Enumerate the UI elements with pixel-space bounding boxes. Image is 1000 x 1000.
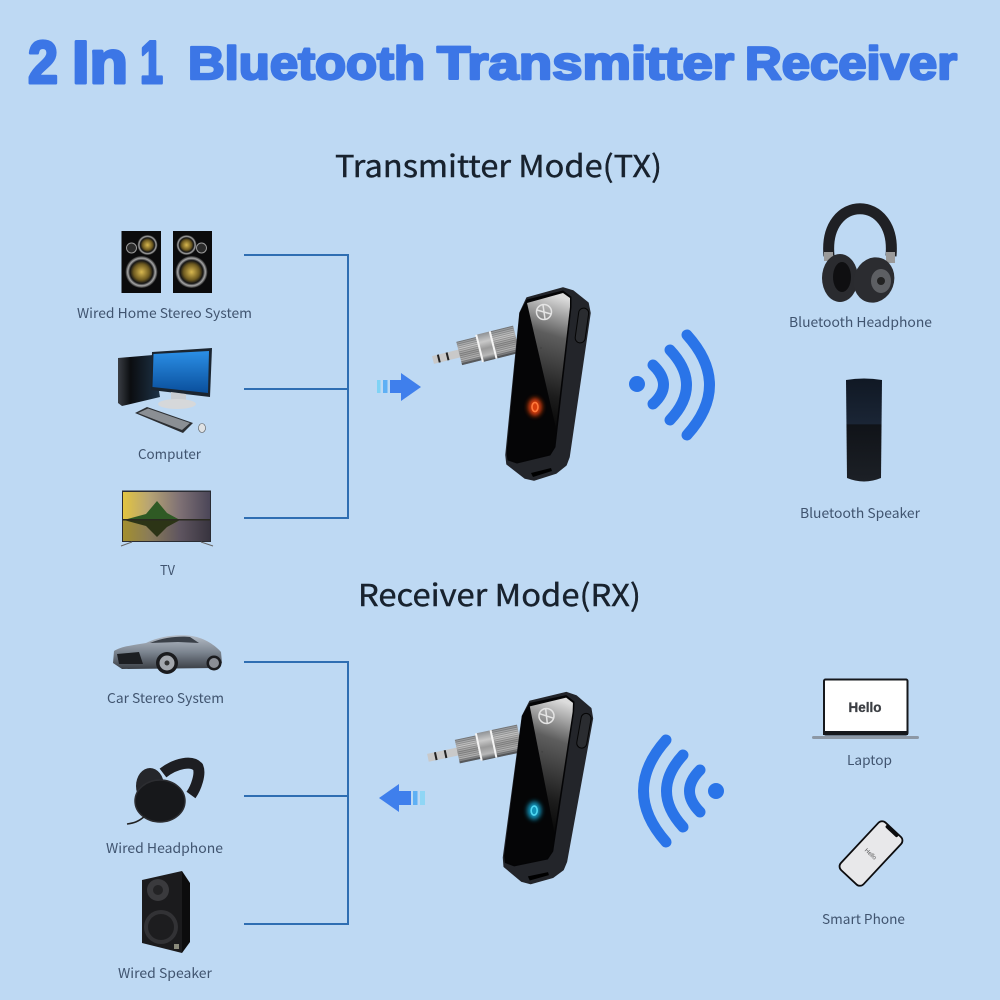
icon: bluetooth speaker [846,378,882,482]
icon: laptop: Hello [848,700,882,715]
label: bluetooth headphone: Bluetooth Headphone [789,311,932,331]
device: receiver adapter [420,688,593,885]
bluetooth logo [539,708,554,724]
title: Receiver [745,37,957,89]
usb port [528,871,549,881]
icon: desktop computer [118,348,212,433]
heading: transmitter mode: Transmitter Mode(TX) [335,142,662,186]
glossy highlight [527,293,570,428]
glossy highlight [525,696,573,833]
title: 2 [28,29,58,96]
title: 1 [140,29,163,96]
arrow: out of receiver [379,784,425,812]
icon: wired headphone [127,763,199,824]
led [527,801,541,820]
side switch [575,307,589,344]
connector: transmitter sources [244,255,348,518]
icon: laptop [812,680,919,739]
bluetooth logo [536,304,552,320]
heading: receiver mode: Receiver Mode(RX) [358,571,641,615]
arrow: into transmitter [377,373,421,401]
label: car stereo system: Car Stereo System [107,687,224,707]
icon: wireless signal in [644,740,724,842]
icon: smart phone: Hello [863,848,878,862]
jack plug [425,725,523,772]
label: smart phone: Smart Phone [822,908,905,928]
icon: smart phone [837,819,905,888]
icon: bluetooth headphone [822,209,901,308]
usb port [531,468,552,477]
icon: home stereo speakers [122,231,212,293]
title [28,29,957,96]
label: bluetooth speaker: Bluetooth Speaker [800,502,921,522]
led [528,398,542,416]
device: transmitter adapter [430,288,590,480]
label: computer: Computer [138,443,202,463]
title: In [72,29,128,96]
label: wired headphone: Wired Headphone [106,837,223,857]
jack plug [430,326,520,374]
side switch [576,713,592,749]
connector: receiver outputs [244,662,348,924]
label: laptop: Laptop [847,749,892,769]
icon: wireless signal out [629,335,710,435]
label: wired speaker: Wired Speaker [118,962,213,982]
label: wired home stereo system: Wired Home Stereo System [77,302,252,322]
icon: wired speaker [142,871,190,953]
title: Bluetooth [188,37,425,89]
title: Transmitter [437,37,734,89]
label: tv: TV [160,559,175,579]
icon: television [121,490,213,546]
icon: car [113,635,222,674]
